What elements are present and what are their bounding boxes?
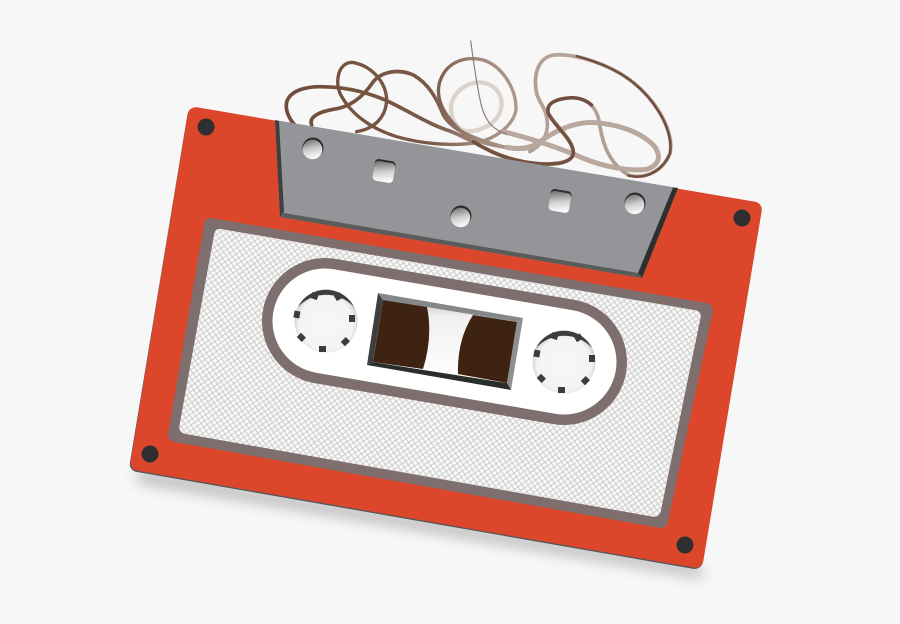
panel right bevel: [638, 188, 678, 278]
window left bevel: [367, 293, 383, 365]
drop shadow: [136, 470, 704, 578]
tangled tape ribbon: [286, 41, 671, 177]
panel bottom bevel: [280, 213, 642, 278]
window right bevel: [507, 318, 523, 390]
corner screws: [142, 118, 750, 554]
round hole left: [302, 138, 324, 159]
top grey head panel: [275, 120, 678, 278]
window top bevel: [378, 293, 523, 322]
right reel: [532, 330, 596, 394]
reel teeth: [293, 292, 355, 352]
panel left bevel: [275, 120, 284, 217]
window bottom bevel: [367, 362, 511, 390]
round hole right: [624, 192, 646, 214]
square hole right: [548, 188, 572, 214]
tape window: [367, 293, 523, 390]
hatched label area: [179, 229, 701, 517]
body dark edge: [138, 116, 754, 561]
left reel: [293, 290, 358, 352]
body red shell: [139, 115, 754, 560]
square hole left: [372, 158, 396, 184]
window opening: [373, 300, 517, 383]
right tape spool: [458, 315, 517, 383]
label frame: [175, 225, 706, 521]
round hole centre: [450, 206, 472, 227]
left tape spool: [373, 300, 429, 369]
reel teeth: [533, 332, 595, 393]
cassette body: [138, 115, 754, 561]
centre pill: [325, 321, 564, 362]
